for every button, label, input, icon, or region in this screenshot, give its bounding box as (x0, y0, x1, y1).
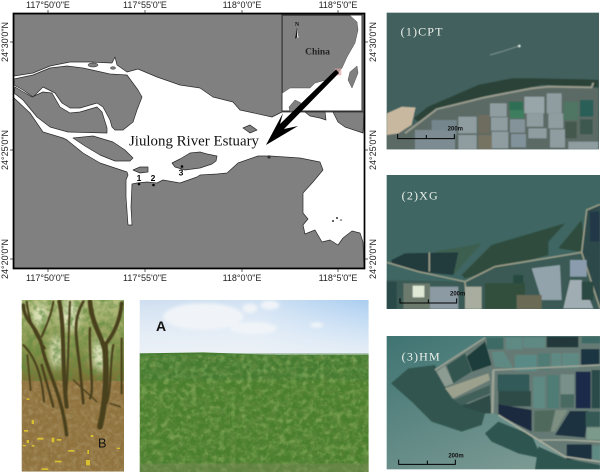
left latitude labels (0, 22, 10, 279)
bottom longitude labels (26, 273, 357, 283)
estuary label: Jiulong River Estuary (129, 134, 260, 150)
China label: China (305, 48, 330, 58)
peninsula (305, 112, 326, 120)
right latitude labels (368, 22, 378, 279)
right latitude labels: 24°25'0"N (368, 130, 378, 170)
map water background (14, 14, 364, 268)
inset map of China (282, 15, 362, 112)
inset mainland (282, 16, 358, 93)
label: (3)HM (402, 350, 441, 364)
ticks (10, 10, 368, 272)
top longitude labels: 117°50'0"E (26, 0, 70, 10)
top longitude labels: 117°55'0"E (123, 0, 167, 10)
map frame (14, 14, 364, 268)
right latitude labels: 24°30'0"N (368, 22, 378, 62)
label A: A (156, 318, 166, 334)
sampling site 1: 1 (137, 173, 142, 183)
satellite panel 1 CPT (387, 13, 599, 149)
Hainan (289, 100, 301, 112)
arrow from inset to estuary (266, 70, 339, 145)
label: (1)CPT (401, 24, 444, 38)
right latitude labels: 24°20'0"N (368, 239, 378, 279)
inset water (282, 15, 362, 111)
bottom longitude labels: 117°55'0"E (123, 273, 167, 283)
estuary island west (73, 136, 133, 161)
scale bar (399, 454, 464, 464)
right land (333, 112, 364, 133)
scale bar: 200m (450, 292, 465, 298)
label B: B (98, 437, 106, 451)
channel land A (14, 66, 142, 130)
north land (14, 14, 364, 117)
photo B mangrove forest interior (22, 300, 124, 472)
label: (2)XG (402, 188, 439, 202)
southeast islets (267, 155, 342, 222)
bottom longitude labels: 117°50'0"E (26, 273, 70, 283)
left latitude labels: 24°25'0"N (0, 130, 10, 170)
scale bar: 200m (448, 454, 464, 460)
small east island (243, 125, 257, 133)
bottom longitude labels: 118°0'0"E (223, 273, 261, 283)
scale bar (398, 127, 463, 139)
channel land B (14, 87, 107, 133)
satellite panel 3 HM (387, 336, 600, 469)
scale bar: 200m (448, 127, 463, 133)
scale bar (400, 292, 465, 303)
map of Jiulong River Estuary (0, 0, 378, 283)
island near site 1 (133, 167, 148, 173)
photo A mangrove canopy (140, 300, 369, 472)
south land (14, 98, 364, 268)
sampling site 2: 2 (151, 173, 156, 183)
north arrow: N (295, 22, 300, 28)
top longitude labels: 118°5'0"E (319, 0, 357, 10)
sampling site 3: 3 (179, 168, 184, 178)
Taiwan (348, 66, 358, 88)
channel islets (88, 63, 116, 69)
bottom longitude labels: 118°5'0"E (319, 273, 357, 283)
satellite panel 2 XG (387, 175, 600, 309)
top longitude labels: 118°0'0"E (223, 0, 261, 10)
left latitude labels: 24°20'0"N (0, 239, 10, 279)
top longitude labels (26, 0, 357, 10)
island near site 3 (172, 152, 217, 170)
left latitude labels: 24°30'0"N (0, 22, 10, 62)
study area marker (335, 69, 341, 75)
